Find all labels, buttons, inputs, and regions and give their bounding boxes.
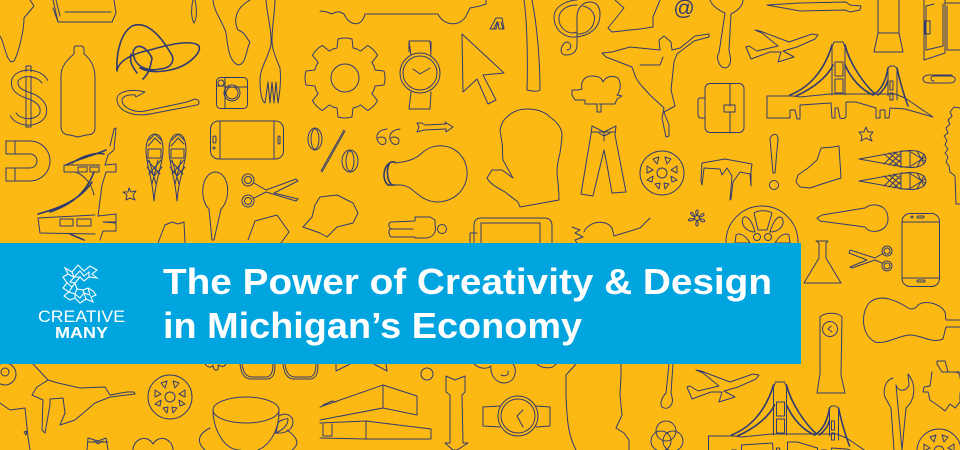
icon: cap — [303, 195, 358, 237]
icon: treble clef — [554, 0, 600, 55]
icon: coffee cup — [199, 397, 297, 450]
logo wordmark: MANY: MANY — [55, 325, 109, 342]
title line 1: The Power of Creativity & Design — [163, 261, 772, 302]
icon: vertical bridge — [38, 128, 116, 240]
icon: venn circles — [651, 421, 683, 450]
icon: gem — [248, 215, 289, 243]
icon: jeans — [581, 126, 626, 196]
icon: wristwatch horizontal — [483, 396, 550, 436]
icon: movie camera right — [923, 361, 960, 411]
icon: flute — [767, 2, 861, 12]
logo wordmark: CREATIVE: CREATIVE — [38, 307, 125, 326]
logo mark: network C — [63, 265, 97, 303]
icon: tall stick — [524, 0, 540, 91]
icon: wheel right — [917, 429, 960, 450]
icon: Michigan shape top left — [0, 0, 34, 62]
icon: Michigan lower — [0, 403, 30, 450]
icon: snowshoe — [169, 134, 186, 201]
icon: arrow — [417, 122, 453, 132]
icon: top blob — [213, 0, 250, 65]
icon: movie camera — [572, 76, 622, 112]
icon: light bulb — [384, 146, 467, 202]
icon: tall arrow — [445, 376, 468, 450]
icon: airplane — [746, 30, 818, 62]
icon: cursor arrow — [462, 34, 504, 104]
icon: door — [924, 0, 960, 60]
icon: smartphone — [210, 121, 284, 159]
icon: gear — [305, 38, 385, 118]
icon: twitter bird — [572, 218, 650, 243]
icon: airplane lower — [687, 370, 759, 402]
icon: wheel — [640, 151, 684, 195]
icon: snowshoe horizontal — [859, 150, 926, 168]
icon: flower lower — [205, 364, 226, 370]
icon: dollar sign — [13, 66, 45, 127]
icon: snowshoe — [146, 134, 163, 201]
icon: small circle — [421, 368, 433, 380]
icon: flashlight — [874, 0, 903, 52]
icon: paperclip — [923, 75, 955, 83]
icon: star — [859, 127, 873, 141]
icon: photo camera app — [216, 78, 248, 108]
icon: wheel lower — [148, 375, 192, 419]
icon: glasses — [240, 364, 318, 379]
icon: star fragments — [336, 364, 387, 371]
icon: flask — [804, 241, 841, 283]
icon: face blob — [474, 364, 556, 383]
icon: violin — [863, 298, 960, 343]
icon: quotation marks — [377, 129, 400, 145]
icon: dancer — [32, 364, 135, 433]
icon: microphone — [203, 172, 228, 240]
icon: exclamation mark — [770, 134, 778, 190]
title — [163, 261, 772, 346]
icon: top car — [320, 0, 486, 24]
icon: bridge lower — [708, 382, 874, 450]
icon: cotton swab — [192, 0, 196, 23]
icon: snowshoe horizontal — [859, 172, 926, 190]
icon: top right blob — [608, 0, 660, 32]
icon: scissors small — [849, 246, 892, 271]
icon: wrench — [884, 374, 914, 450]
icon: boot — [796, 146, 841, 188]
icon: guitar lower — [661, 364, 673, 408]
title line 2: in Michigan’s Economy — [163, 305, 582, 346]
icon: scissors — [242, 174, 298, 207]
icon: ballerina — [602, 34, 709, 137]
panel: title banner — [0, 243, 801, 364]
icon: mitten — [487, 109, 562, 207]
icon: book — [53, 0, 116, 22]
icon: grandfather clock — [817, 313, 845, 393]
icon: tree — [944, 107, 960, 204]
icon: Michigan large — [566, 364, 629, 450]
icon: percent sign — [308, 128, 358, 172]
icon: Mackinac bridge — [767, 42, 933, 119]
icon: small M — [490, 18, 504, 29]
icon: jeans lower — [87, 438, 108, 450]
icon: scribble — [117, 25, 199, 79]
icon: hairdryer — [817, 205, 888, 231]
icon: magnet — [6, 141, 50, 181]
icon: person bars — [389, 217, 446, 238]
icon: briefcase — [698, 84, 744, 133]
icon: folding table — [701, 159, 752, 200]
icon: guitar — [710, 0, 743, 68]
icon: heart — [133, 438, 173, 450]
icon: tablet — [470, 218, 552, 243]
icon: bottle — [61, 46, 95, 137]
icon: fork — [260, 0, 280, 103]
icon: books — [320, 385, 431, 439]
icon: wristwatch — [400, 41, 440, 109]
logo: Creative Many — [38, 265, 125, 342]
icon: flower — [688, 210, 705, 226]
icon: film reel — [726, 206, 798, 278]
icon: hook — [117, 90, 199, 115]
icon: bear shape — [158, 222, 185, 243]
icon: at sign lower — [0, 363, 16, 385]
icon: small star — [123, 188, 136, 200]
icon: smartphone upright — [902, 214, 940, 286]
